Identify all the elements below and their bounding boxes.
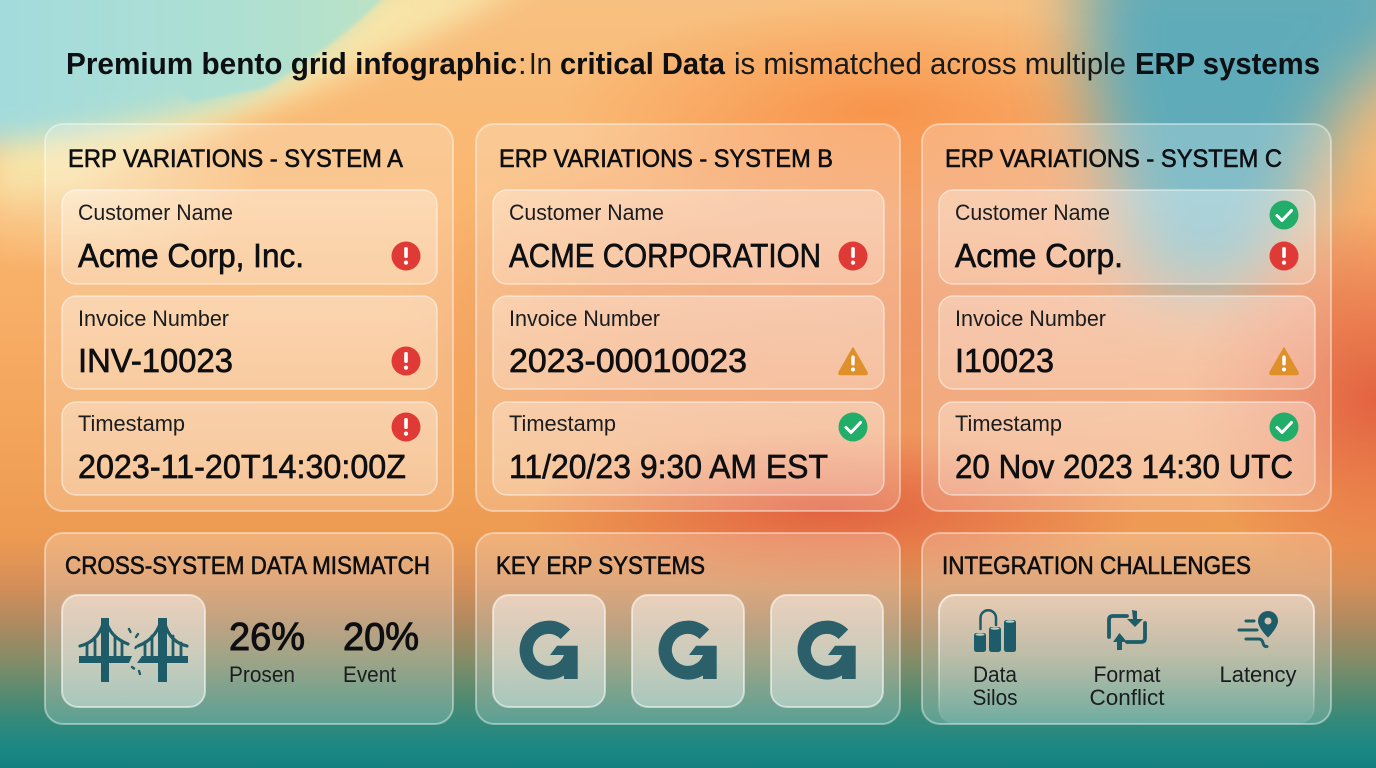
field: timestamp C bbox=[939, 402, 1315, 495]
panel: integration challenges bbox=[922, 533, 1331, 724]
field: invoice number B bbox=[493, 296, 884, 389]
title: critical Data bbox=[560, 46, 726, 81]
heading: cross-system data mismatch: CROSS-SYSTEM DATA MISMATCH bbox=[65, 552, 430, 580]
challenge: data silos bbox=[972, 610, 1018, 710]
challenge: format conflict: Format bbox=[1094, 662, 1160, 687]
challenge: format conflict bbox=[1090, 610, 1164, 710]
field: invoice number C: Invoice Number bbox=[955, 306, 1106, 331]
field: customer name C: Acme Corp. bbox=[955, 237, 1123, 274]
title: In bbox=[529, 46, 552, 81]
field: invoice number B: 2023-00010023 bbox=[509, 342, 747, 379]
inner tray bbox=[939, 595, 1314, 724]
heading: integration challenges: INTEGRATION CHALLENGES bbox=[942, 552, 1251, 580]
title bbox=[66, 46, 1320, 81]
field: customer name C bbox=[939, 190, 1315, 284]
field: invoice number C: I10023 bbox=[955, 342, 1054, 379]
stat: 26% Prosen bbox=[229, 616, 305, 687]
field: invoice number C bbox=[939, 296, 1315, 389]
field: invoice number A: Invoice Number bbox=[78, 306, 229, 331]
panel: ERP variations system B bbox=[476, 124, 900, 511]
stat: 26% Prosen: Prosen bbox=[229, 662, 295, 687]
logo tile 2 bbox=[632, 595, 744, 707]
field: timestamp A bbox=[62, 402, 437, 495]
field: timestamp A: 2023-11-20T14:30:00Z bbox=[78, 448, 406, 485]
heading: system A: ERP VARIATIONS - SYSTEM A bbox=[68, 145, 403, 173]
field: timestamp B: Timestamp bbox=[509, 411, 616, 436]
panel: cross-system data mismatch bbox=[45, 533, 453, 724]
challenge: format conflict: Conflict bbox=[1090, 685, 1164, 710]
stat: 20% Event: Event bbox=[343, 662, 396, 687]
field: customer name A: Customer Name bbox=[78, 200, 233, 225]
challenge: data silos: Silos bbox=[972, 685, 1018, 710]
heading: system B: ERP VARIATIONS - SYSTEM B bbox=[499, 145, 833, 173]
field: invoice number A: INV-10023 bbox=[78, 342, 233, 379]
stat: 20% Event bbox=[343, 616, 419, 687]
stat: 26% Prosen: 26% bbox=[229, 616, 305, 659]
field: customer name A bbox=[62, 190, 437, 284]
field: invoice number B: Invoice Number bbox=[509, 306, 660, 331]
field: customer name B: Customer Name bbox=[509, 200, 664, 225]
field: invoice number A bbox=[62, 296, 437, 389]
title: Premium bento grid infographic bbox=[66, 46, 517, 81]
field: timestamp A: Timestamp bbox=[78, 411, 185, 436]
logo tile 1 bbox=[493, 595, 605, 707]
logo tile 3 bbox=[771, 595, 883, 707]
field: timestamp C: 20 Nov 2023 14:30 UTC bbox=[955, 448, 1293, 485]
field: customer name B bbox=[493, 190, 884, 284]
title: : bbox=[518, 46, 527, 81]
field: customer name A: Acme Corp, Inc. bbox=[78, 237, 304, 274]
icon tile: broken bridge bbox=[62, 595, 205, 707]
stat: 20% Event: 20% bbox=[343, 616, 419, 659]
field: customer name C: Customer Name bbox=[955, 200, 1110, 225]
title: is mismatched across multiple bbox=[734, 46, 1126, 81]
heading: key ERP systems: KEY ERP SYSTEMS bbox=[496, 552, 705, 580]
title: ERP systems bbox=[1135, 46, 1320, 81]
panel: ERP variations system A bbox=[45, 124, 453, 511]
field: timestamp C: Timestamp bbox=[955, 411, 1062, 436]
field: timestamp B: 11/20/23 9:30 AM EST bbox=[509, 448, 828, 485]
challenge: latency bbox=[1220, 611, 1296, 687]
field: timestamp B bbox=[493, 402, 884, 495]
field: customer name B: ACME CORPORATION bbox=[509, 237, 821, 274]
challenge: data silos: Data bbox=[973, 662, 1018, 687]
heading: system C: ERP VARIATIONS - SYSTEM C bbox=[945, 145, 1282, 173]
panel: key ERP systems bbox=[476, 533, 900, 724]
panel: ERP variations system C bbox=[922, 124, 1331, 511]
challenge: latency: Latency bbox=[1220, 662, 1296, 687]
